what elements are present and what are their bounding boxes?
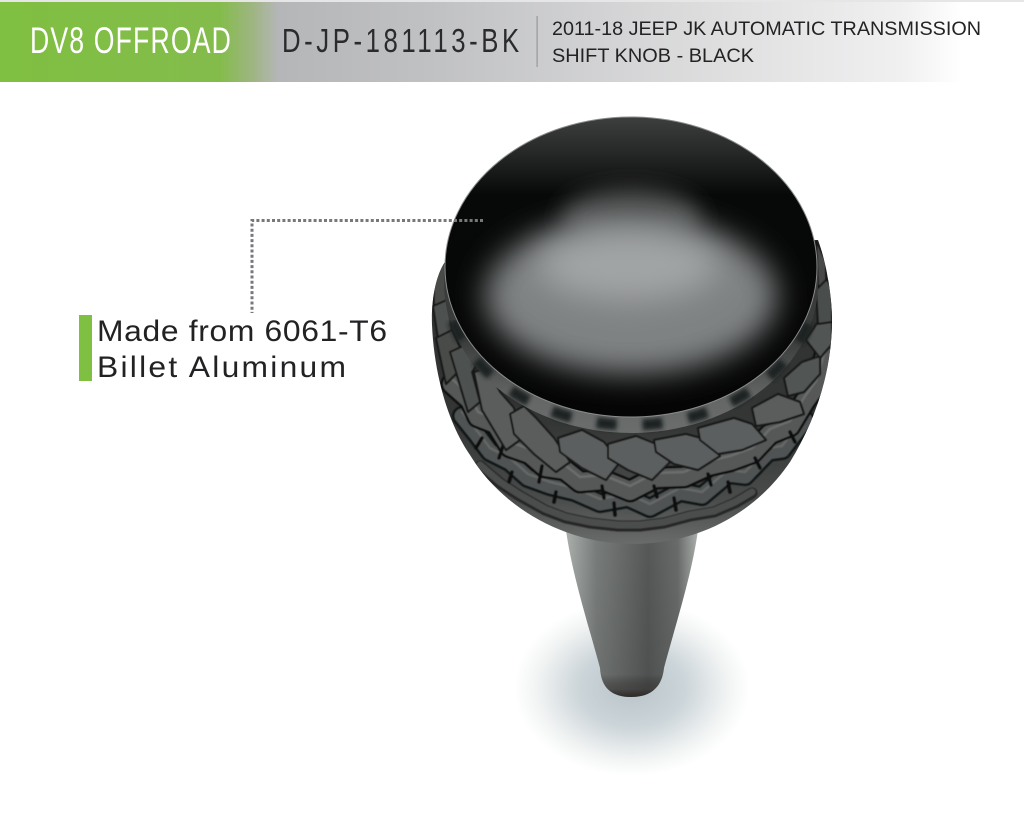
product title: SHIFT KNOB - BLACK <box>552 45 754 67</box>
product title: 2011-18 JEEP JK AUTOMATIC TRANSMISSION <box>552 18 981 40</box>
knob stem <box>566 530 698 697</box>
product title <box>552 18 981 67</box>
callout text: Billet Aluminum <box>97 350 346 384</box>
knob body <box>432 240 832 544</box>
tread row 3 <box>462 412 805 508</box>
dotted leader line <box>252 220 483 313</box>
part number: D-JP-181113-BK <box>282 23 519 60</box>
dome top face <box>445 117 817 417</box>
tire tread <box>452 351 825 526</box>
tread lug gaps <box>476 432 795 515</box>
callout text <box>97 314 387 384</box>
callout text: Made from 6061-T6 <box>97 314 387 348</box>
dome highlight <box>561 188 701 248</box>
tread outer lugs <box>433 240 832 480</box>
header divider <box>536 16 538 67</box>
tread row 4 <box>480 465 752 526</box>
callout accent bar <box>79 315 92 381</box>
rim band <box>444 272 818 433</box>
tread row 2 <box>452 351 825 491</box>
shift knob product <box>432 117 832 697</box>
floor shadow <box>514 600 750 776</box>
callout <box>79 314 387 384</box>
brand name: DV8 OFFROAD <box>30 20 231 61</box>
header banner <box>0 0 1024 82</box>
